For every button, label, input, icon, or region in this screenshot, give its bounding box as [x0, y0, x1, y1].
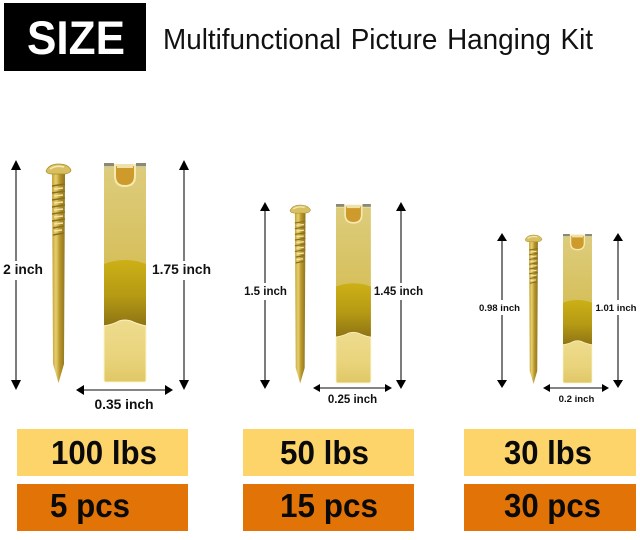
label: 2 inch: 2 inch	[3, 262, 43, 277]
panel: large hanger set	[3, 160, 211, 412]
arrow: nail length	[11, 160, 21, 390]
quantity bar: 15 pcs	[243, 484, 414, 531]
quantity bar: 15 pcs: 15 pcs	[280, 487, 378, 524]
icon: large nail	[46, 164, 71, 383]
arrow: hook length	[396, 202, 406, 389]
weight bar: 100 lbs	[17, 429, 188, 476]
label: 0.2 inch: 0.2 inch	[559, 394, 594, 405]
weight bar: 100 lbs: 100 lbs	[51, 434, 157, 471]
quantity bar: 5 pcs	[17, 484, 188, 531]
label: 0.35 inch: 0.35 inch	[94, 397, 154, 412]
label: 0.98 inch: 0.98 inch	[479, 303, 520, 314]
quantity bar: 5 pcs: 5 pcs	[50, 487, 130, 524]
arrow: hook width	[313, 384, 392, 392]
panel: medium hanger set	[244, 202, 423, 406]
arrow: hook length	[179, 160, 189, 390]
panel: small hanger set	[479, 233, 637, 405]
arrow: hook length	[613, 233, 623, 388]
quantity bar: 30 pcs: 30 pcs	[504, 487, 601, 524]
icon: small nail	[525, 235, 542, 384]
weight bar: 30 lbs: 30 lbs	[504, 434, 592, 471]
badge: SIZE	[4, 3, 146, 71]
weight bar: 50 lbs: 50 lbs	[280, 434, 369, 471]
arrow: nail length	[260, 202, 270, 389]
icon: small hook	[563, 234, 592, 383]
quantity bar: 30 pcs	[464, 484, 636, 531]
arrow: hook width	[543, 384, 609, 392]
label: 1.01 inch: 1.01 inch	[595, 303, 637, 314]
label: 1.75 inch: 1.75 inch	[152, 262, 211, 277]
icon: medium hook	[336, 204, 371, 383]
icon: large hook	[104, 163, 146, 382]
arrow: nail length	[497, 233, 507, 388]
label: 1.45 inch: 1.45 inch	[374, 286, 423, 298]
weight bar: 30 lbs	[464, 429, 636, 476]
label: 0.25 inch: 0.25 inch	[328, 394, 377, 406]
title: Multifunctional Picture Hanging Kit	[163, 24, 593, 56]
label: 1.5 inch: 1.5 inch	[244, 286, 287, 298]
arrow: hook width	[76, 385, 173, 395]
icon: medium nail	[290, 205, 310, 383]
badge: SIZE: SIZE	[27, 11, 125, 64]
weight bar: 50 lbs	[243, 429, 414, 476]
